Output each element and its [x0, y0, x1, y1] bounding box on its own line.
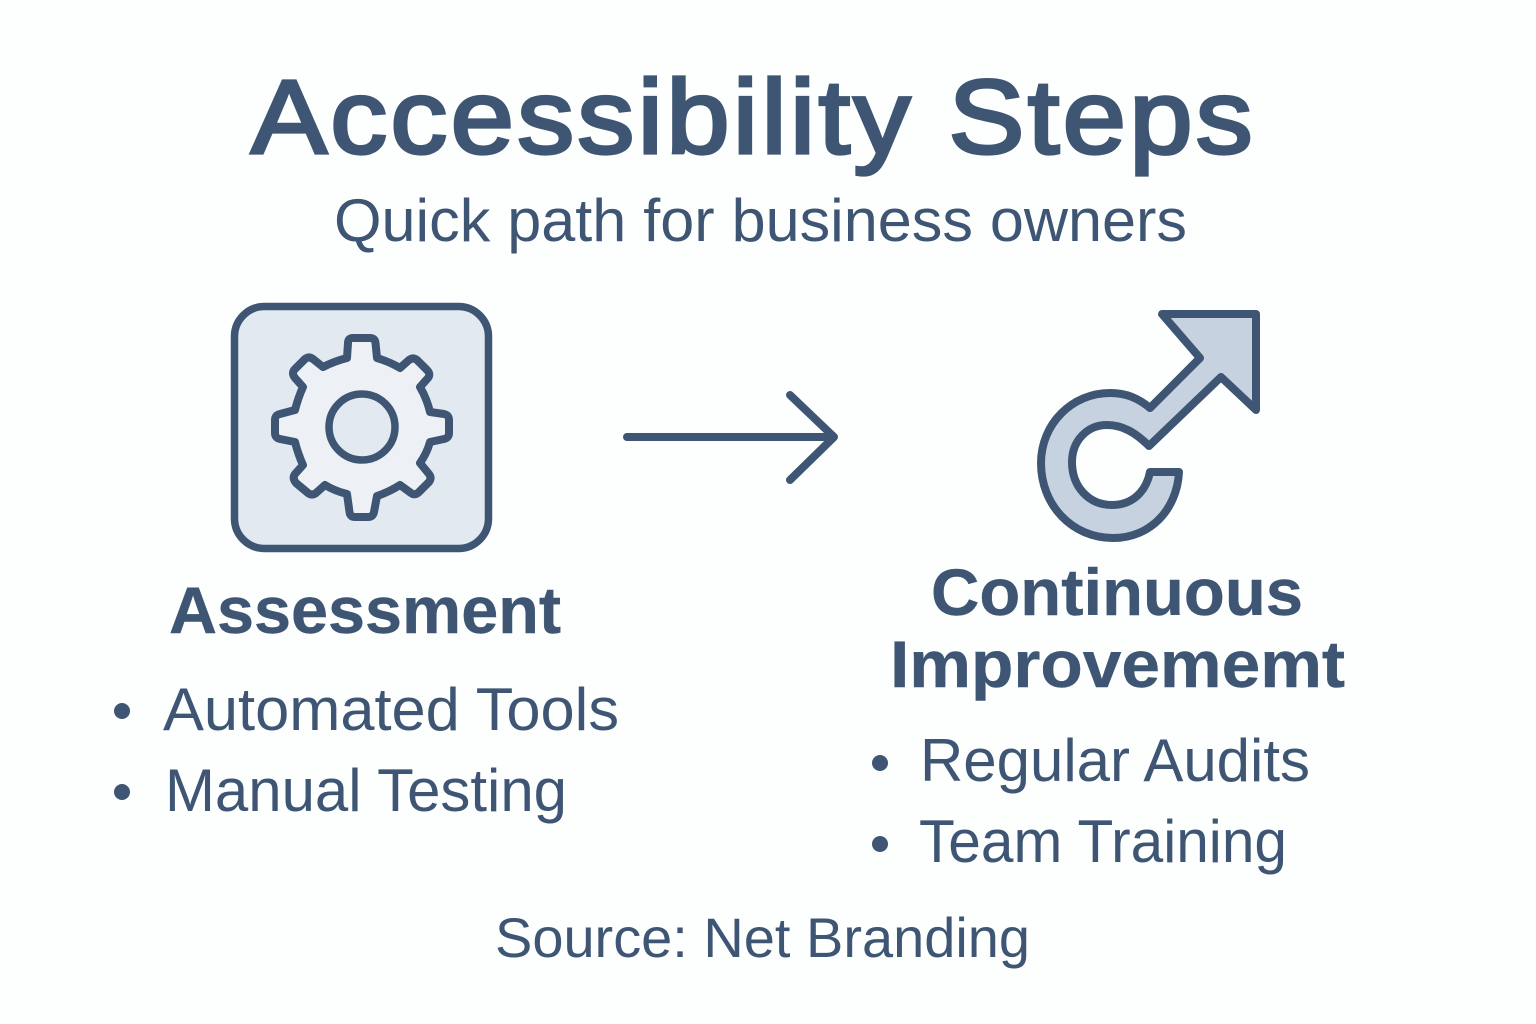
icon: gear in rounded square [234, 306, 488, 548]
icon: circular arrow pointing up-right [1041, 314, 1256, 538]
list: assessment items: Automated Tools [163, 676, 619, 743]
heading: continuous improvement: Continuous [931, 555, 1303, 629]
source note: Source: Net Branding [495, 906, 1030, 969]
list: improvement items: Regular Audits [920, 727, 1310, 794]
list: assessment items [114, 676, 619, 824]
heading: assessment: Assessment [169, 573, 561, 647]
list: improvement items: Team Training [919, 808, 1287, 875]
heading: continuous improvement: Improvememt [890, 627, 1345, 701]
list: assessment items: Manual Testing [165, 757, 567, 824]
arrow: assessment to improvement [627, 395, 834, 480]
title: Accessibility Steps [251, 59, 1256, 176]
subtitle: Quick path for business owners [334, 187, 1187, 254]
list: improvement items [872, 727, 1310, 875]
heading: continuous improvement [890, 555, 1345, 701]
